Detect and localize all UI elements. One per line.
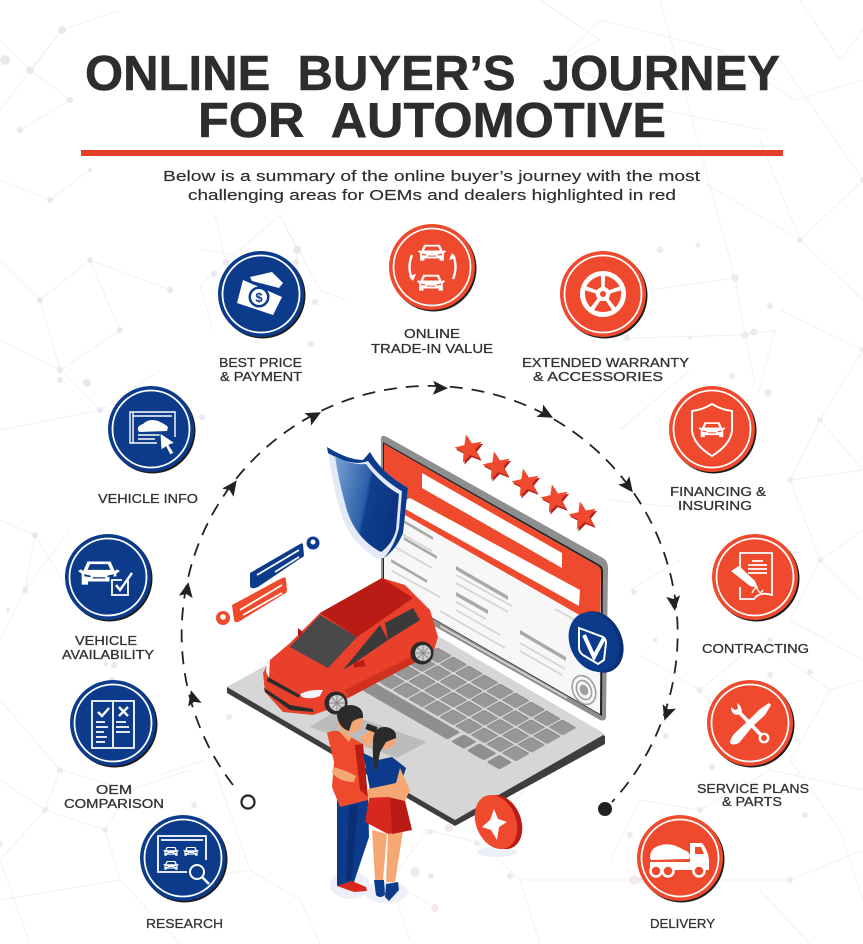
label: BEST PRICE — [219, 355, 302, 370]
icon: cars swap — [389, 224, 476, 312]
step: vehicle info — [98, 386, 198, 506]
rating stars — [452, 431, 601, 533]
laptop illustration — [227, 436, 608, 826]
screen red header — [384, 444, 601, 622]
touchpad — [310, 710, 427, 758]
step: research — [140, 815, 228, 931]
label: & ACCESSORIES — [533, 369, 663, 384]
laptop base — [227, 606, 605, 826]
label — [219, 355, 302, 384]
label: RESEARCH — [146, 916, 223, 931]
icon: comparison sheet — [70, 680, 158, 768]
label: DELIVERY — [650, 916, 715, 931]
car wheels — [324, 642, 434, 714]
path arrowheads — [179, 381, 682, 723]
title underline — [81, 150, 783, 156]
car roof — [320, 578, 413, 637]
label: EXTENDED WARRANTY — [522, 355, 689, 370]
step: oem comparison — [64, 680, 164, 811]
circular dashed journey path — [179, 381, 682, 816]
label — [697, 781, 809, 809]
icon: browser search — [140, 815, 228, 902]
label: AVAILABILITY — [62, 647, 154, 662]
car mirrors — [298, 628, 365, 668]
icon: money: $ — [255, 290, 263, 305]
label — [371, 326, 493, 356]
car side windows — [343, 608, 420, 670]
screen seal — [568, 672, 600, 708]
woman — [363, 727, 412, 901]
label: COMPARISON — [64, 796, 164, 811]
man — [327, 705, 378, 892]
chat bubble: blue — [250, 536, 320, 588]
verified badge — [559, 603, 633, 681]
step: best price & payment — [218, 251, 306, 384]
label — [522, 355, 689, 384]
chat bubble: red — [216, 577, 287, 625]
label: ONLINE — [404, 326, 460, 341]
couple looking at phone — [327, 705, 412, 903]
laptop screen — [381, 436, 608, 720]
label: INSURING — [678, 498, 752, 513]
label: & PAYMENT — [220, 369, 302, 384]
icon: crossed tools — [707, 680, 794, 768]
label: FINANCING & — [670, 484, 766, 499]
label — [670, 484, 766, 513]
path start marker — [242, 796, 254, 808]
screen text lines — [391, 520, 566, 661]
icon: wheel — [560, 251, 648, 338]
step: delivery — [637, 815, 724, 931]
icon: shield car — [669, 386, 756, 474]
label — [64, 782, 164, 811]
label: OEM — [96, 782, 132, 797]
step: financing & insuring — [669, 386, 766, 513]
star token — [467, 789, 530, 857]
icon: tow truck — [637, 815, 724, 902]
label: SERVICE PLANS — [697, 781, 809, 796]
path end marker — [598, 802, 612, 816]
car headlights — [300, 690, 323, 698]
subtitle: Below is a summary of the online buyer’s journey with the most — [163, 169, 700, 185]
title: ONLINE BUYER’S JOURNEY — [85, 47, 780, 101]
step: extended warranty & accessories — [522, 251, 689, 384]
title: FOR AUTOMOTIVE — [198, 94, 666, 148]
subtitle: challenging areas for OEMs and dealers highlighted in red — [188, 188, 676, 204]
icon: signed contract — [712, 534, 800, 622]
subtitle — [163, 169, 700, 204]
icon: car with checkbox — [65, 534, 152, 622]
step: contracting — [702, 534, 809, 656]
title — [85, 47, 780, 148]
security shield — [327, 447, 408, 558]
label: VEHICLE — [75, 633, 137, 648]
label: TRADE-IN VALUE — [371, 341, 493, 356]
icon: browser car cursor — [108, 386, 196, 474]
label: VEHICLE INFO — [98, 491, 198, 506]
step: online trade-in value — [371, 224, 493, 356]
car windshield — [290, 615, 357, 668]
label: CONTRACTING — [702, 641, 809, 656]
car grille and bumper — [267, 677, 300, 698]
label: & PARTS — [722, 794, 782, 809]
keyboard — [361, 647, 578, 771]
label — [62, 633, 154, 662]
step: service plans & parts — [697, 680, 809, 809]
red car — [263, 578, 438, 715]
step: vehicle availability — [62, 534, 154, 662]
screen white bars — [422, 473, 562, 568]
